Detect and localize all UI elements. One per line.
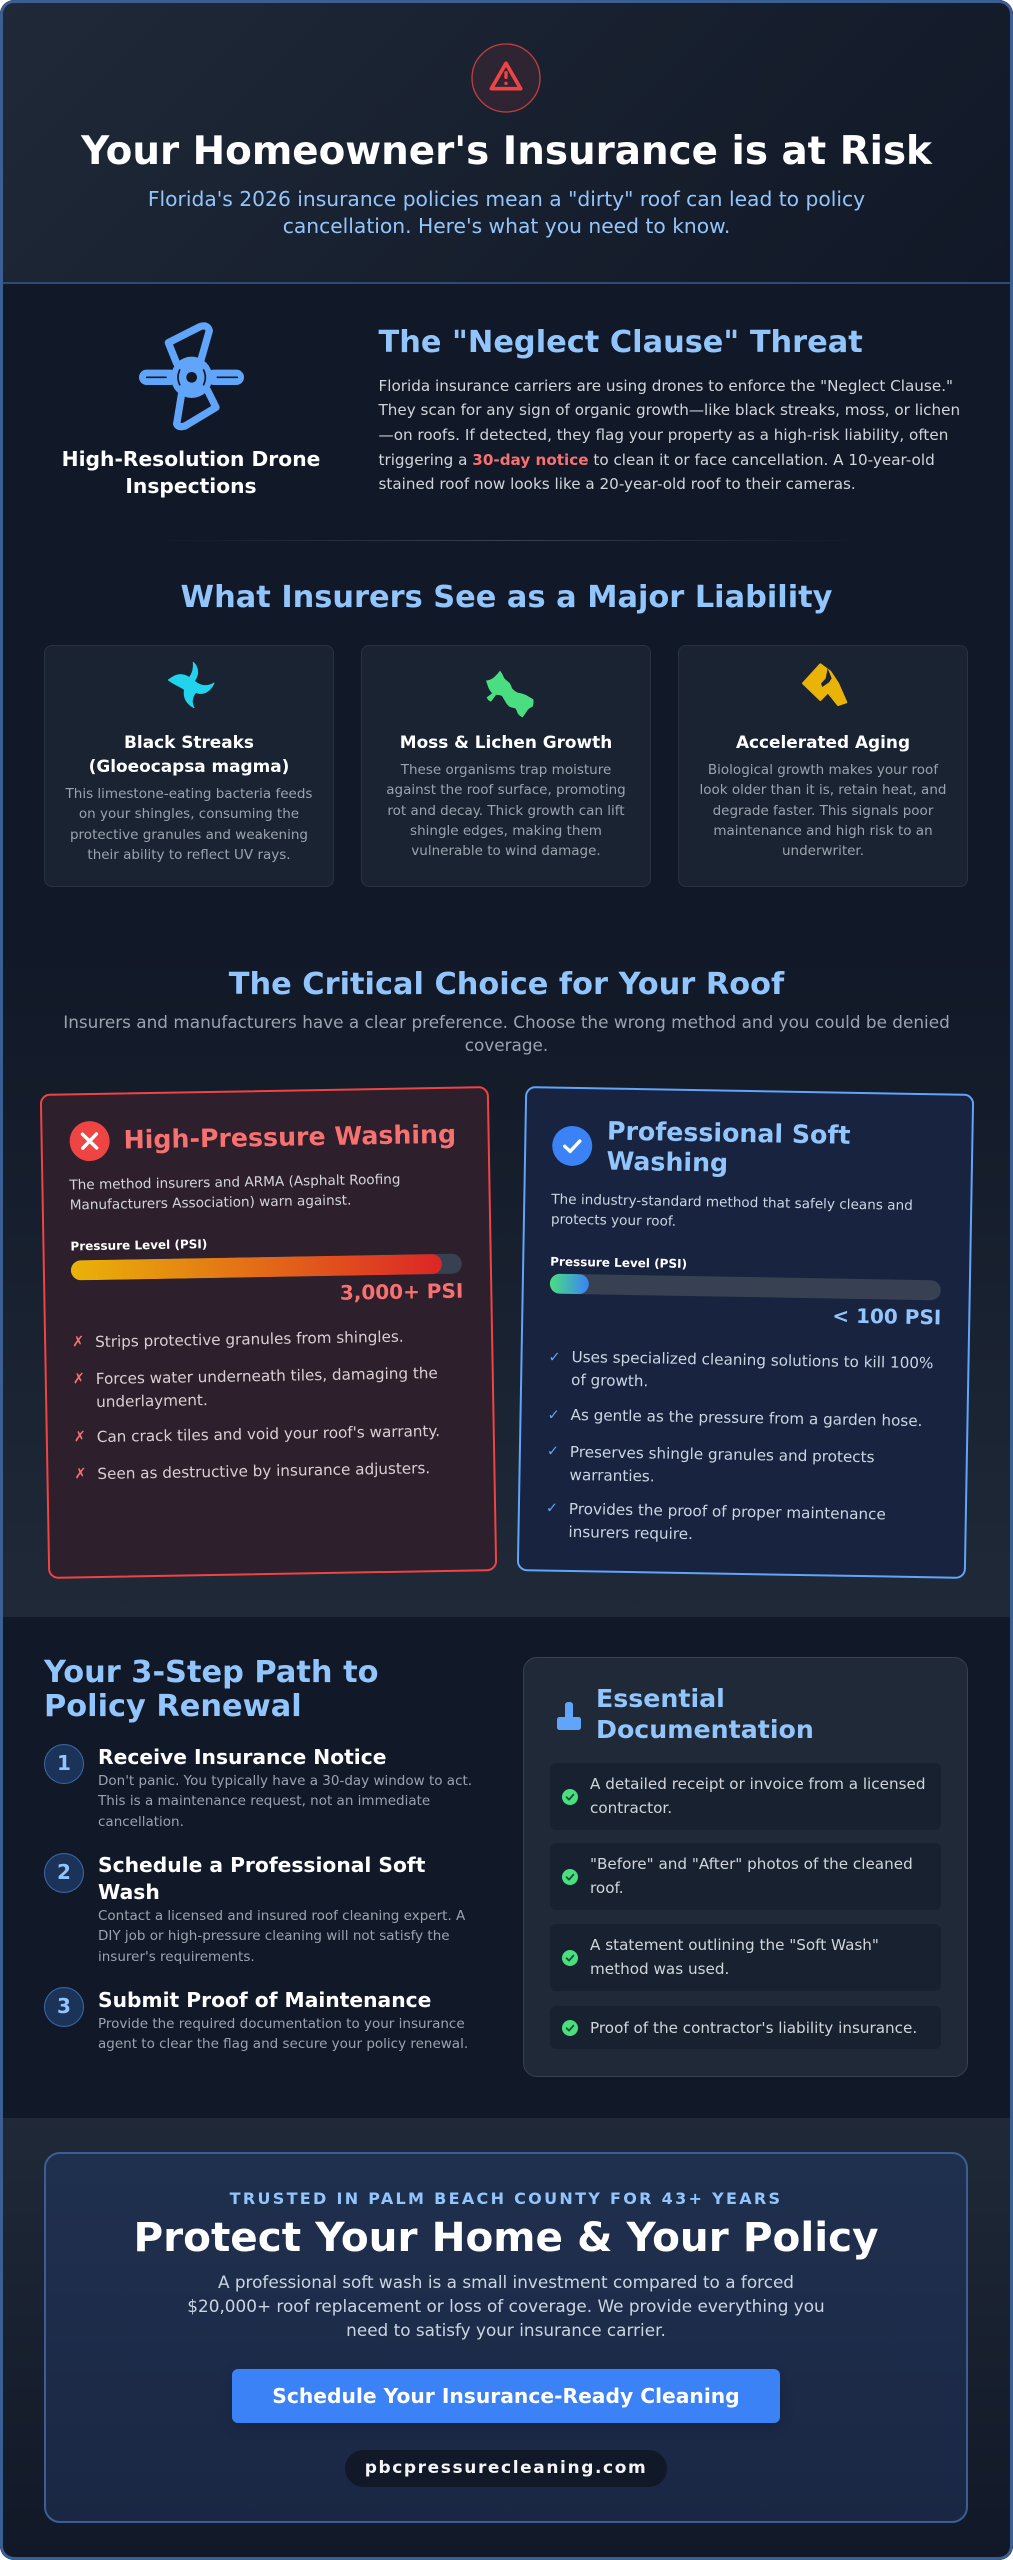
panel heading: Essential [596,1684,725,1713]
header section [0,0,1013,284]
card title: Accelerated Aging [736,732,910,752]
list: dangers: ✗ [72,1334,84,1350]
cta text [187,2272,825,2340]
text: neglect clause body: —on roofs. If detected, they flag your property as a high-risk liability, often [378,426,948,444]
heading: steps: Your 3-Step Path to [44,1655,379,1690]
card text: look older than it is, retain heat, and [700,782,946,798]
card text: This limestone-eating bacteria feeds [66,786,312,802]
drone caption: Inspections [125,474,257,498]
card heading: High-Pressure Washing [123,1119,456,1154]
pressure bar [549,1273,940,1300]
step 2 title [98,1853,425,1904]
section: call to action [0,2118,1013,2560]
list: benefits: As gentle as the pressure from a garden hose. [570,1405,922,1430]
item text [590,1775,926,1817]
list: dangers: ✗ [72,1371,84,1387]
pressure label: Pressure Level (PSI) [70,1237,207,1253]
text: neglect clause body: stained roof now looks like a 20-year-old roof to their cameras. [378,475,856,493]
icon: moss blob [486,670,534,718]
heading: neglect clause: The "Neglect Clause" Threat [378,325,863,360]
step 3 text: Provide the required documentation to your insurance [98,2016,465,2032]
list: benefits: ✓ [547,1407,559,1423]
icon: document stamp [557,1702,581,1730]
card text [700,762,946,859]
card text: underwriter. [782,843,864,859]
card description: protects your roof. [550,1211,676,1230]
list: dangers: Can crack tiles and void your roof's warranty. [96,1421,440,1445]
step 1 title: Receive Insurance Notice [98,1744,386,1768]
item text: roof. [590,1879,624,1897]
card text [65,786,312,863]
item text: contractor. [590,1799,672,1817]
step 3 text [98,2016,468,2052]
panel: moss and lichen [361,645,651,887]
section: threat and liabilities [0,284,1013,940]
item text: Proof of the contractor's liability insurance. [590,2018,917,2036]
heading: steps [44,1655,379,1724]
doc item 4 [550,2006,941,2049]
pressure label: Pressure Level (PSI) [550,1254,687,1270]
eyebrow: TRUSTED IN PALM BEACH COUNTY FOR 43+ YEARS [230,2189,782,2208]
heading: major liability: What Insurers See as a Major Liability [181,580,832,615]
list: benefits: insurers require. [568,1522,693,1542]
card heading [606,1116,850,1177]
pressure value: 3,000+ PSI [339,1278,463,1304]
website pill [345,2450,667,2487]
text: neglect clause body: Florida insurance carriers are using drones to enforce the "Neglect Clause." [378,377,953,395]
step 2 title: Schedule a Professional Soft [98,1853,425,1877]
doc item 2 [550,1843,941,1910]
icon: aging tool [802,663,848,706]
icon: green check [562,1950,578,1966]
list: benefits: Uses specialized cleaning solutions to kill 100% [571,1348,933,1372]
button: Schedule Your Insurance-Ready Cleaning [272,2384,740,2408]
panel heading: Documentation [596,1715,814,1744]
heading: critical choice: The Critical Choice for Your Roof [229,967,784,1002]
card text [386,762,626,859]
item text: "Before" and "After" photos of the cleaned [590,1855,913,1873]
item text: A detailed receipt or invoice from a licensed [590,1775,926,1793]
step number 2 [44,1853,84,1893]
panel heading [596,1684,814,1744]
panel: cta box [44,2152,968,2523]
cta text: $20,000+ roof replacement or loss of coverage. We provide everything you [187,2296,825,2316]
section: critical choice [0,940,1013,1617]
step number 1 [44,1744,84,1784]
subtitle: cancellation. Here's what you need to know. [283,214,730,238]
icon: drone [139,322,244,430]
panel: professional soft washing [516,1086,974,1578]
card text: degrade faster. This signals poor [713,803,933,819]
icon: green check [562,1789,578,1805]
card text: rot and decay. Thick growth can lift [387,803,625,819]
step 2 text: insurer's requirements. [98,1949,255,1965]
list: dangers: Forces water underneath tiles, damaging the [95,1363,437,1387]
text: neglect clause body [378,377,960,493]
step 1 text: This is a maintenance request, not an immediate [98,1793,430,1809]
step 2 title: Wash [98,1880,160,1904]
text: neglect clause body: They scan for any sign of organic growth—like black streaks, moss, or lichen [378,401,960,419]
list: dangers: ✗ [73,1429,86,1445]
list: benefits [545,1348,933,1542]
text: neglect clause body: triggering a 30-day notice to clean it or face cancellation. A 10-year-old [378,451,935,469]
list: dangers [72,1327,440,1482]
card description [69,1171,400,1213]
icon: warning triangle in circle [471,43,541,113]
pressure value: < 100 PSI [832,1303,941,1328]
step 2 text: DIY job or high-pressure cleaning will not satisfy the [98,1928,450,1944]
panel: black streaks [44,645,334,887]
cta title: Protect Your Home & Your Policy [133,2213,879,2261]
drone caption: High-Resolution Drone [62,446,320,470]
card text: These organisms trap moisture [401,762,611,778]
list: dangers: Seen as destructive by insurance adjusters. [97,1458,430,1482]
list: benefits: Preserves shingle granules and protects [569,1442,874,1465]
card description: The method insurers and ARMA (Asphalt Roofing [69,1171,400,1192]
drone caption [62,446,320,498]
card text: their ability to reflect UV rays. [87,847,291,863]
cta text: need to satisfy your insurance carrier. [346,2320,666,2340]
step 2 text: Contact a licensed and insured roof cleaning expert. A [98,1908,465,1924]
list: benefits: ✓ [546,1443,559,1459]
step 3 title: Submit Proof of Maintenance [98,1988,431,2012]
list: dangers: Strips protective granules from shingles. [94,1327,403,1351]
pressure bar [70,1253,462,1280]
panel: high-pressure washing [39,1086,497,1578]
step number 2: 2 [57,1860,71,1884]
card title [89,732,289,776]
card text: against the roof surface, promoting [386,782,626,798]
section: steps and documentation [0,1617,1013,2118]
card description: The industry-standard method that safely cleans and [551,1191,912,1213]
card title: (Gloeocapsa magma) [89,756,289,776]
item text [590,1936,879,1978]
icon: green check [562,2020,578,2036]
cta text: A professional soft wash is a small investment compared to a forced [218,2272,794,2292]
step 1 text: cancellation. [98,1814,184,1830]
step 1 text [98,1773,472,1830]
icon: red cross [69,1120,109,1161]
card text: maintenance and high risk to an [713,823,933,839]
card text: protective granules and weakening [70,827,308,843]
list: benefits: ✓ [545,1500,558,1516]
list: benefits: of growth. [570,1371,648,1390]
step 1 text: Don't panic. You typically have a 30-day window to act. [98,1773,472,1789]
text: critical choice intro [63,1012,950,1054]
list: benefits: Provides the proof of proper maintenance [568,1499,885,1522]
item text: method was used. [590,1960,729,1978]
panel: accelerated aging [678,645,968,887]
item text: A statement outlining the "Soft Wash" [590,1936,879,1954]
button [232,2369,780,2423]
icon: blue check [551,1125,592,1166]
list: benefits: warranties. [569,1465,654,1484]
heading: steps: Policy Renewal [44,1689,302,1724]
step number 3: 3 [57,1994,71,2018]
step 3 text: agent to clear the flag and secure your policy renewal. [98,2036,468,2052]
title: Your Homeowner's Insurance is at Risk [81,129,932,174]
card heading: Washing [606,1146,728,1177]
doc item 3 [550,1924,941,1991]
list: dangers: ✗ [74,1466,86,1482]
icon: pinwheel [168,662,214,708]
subtitle [148,187,865,238]
step number 1: 1 [57,1751,71,1775]
subtitle: Florida's 2026 insurance policies mean a "dirty" roof can lead to policy [148,187,865,211]
step number 3 [44,1987,84,2027]
icon: green check [562,1869,578,1885]
text: critical choice intro: coverage. [465,1034,548,1054]
card text: Biological growth makes your roof [708,762,938,778]
text: critical choice intro: Insurers and manufacturers have a clear preference. Choose the wrong method and you could be denied [63,1012,950,1032]
card description [550,1191,912,1230]
item text [590,1855,913,1897]
card heading: Professional Soft [606,1116,850,1149]
card text: shingle edges, making them [410,823,602,839]
card text: on your shingles, consuming the [79,806,299,822]
panel: essential documentation [523,1657,968,2077]
card title: Moss & Lichen Growth [400,732,612,752]
website pill: pbcpressurecleaning.com [365,2458,647,2478]
card text: vulnerable to wind damage. [411,843,601,859]
list: benefits: ✓ [548,1349,560,1365]
doc item 1 [550,1763,941,1830]
step 2 text [98,1908,466,1965]
list: dangers: underlayment. [96,1390,207,1410]
card title: Black Streaks [124,732,254,752]
card description: Manufacturers Association) warn against. [69,1192,351,1213]
